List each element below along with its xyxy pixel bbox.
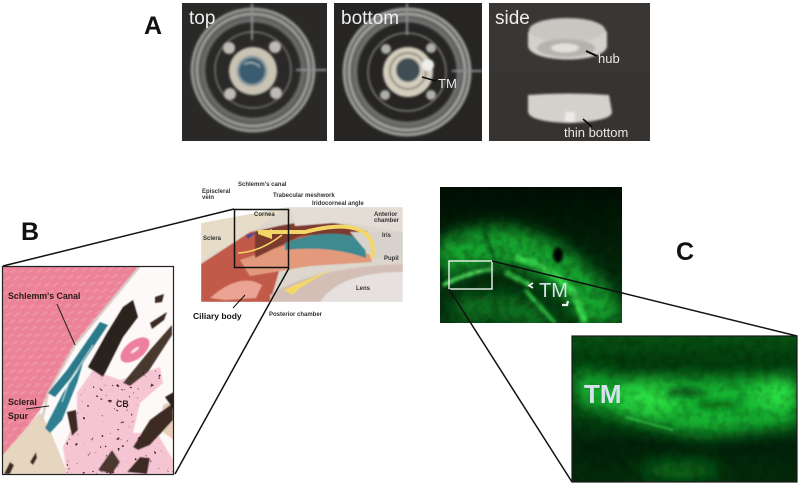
label: Iris: Iris bbox=[382, 233, 392, 239]
photo: histology section: Spur bbox=[8, 411, 29, 421]
label: TM on dish: TM bbox=[438, 76, 457, 91]
photo: bottom view of culture dish bbox=[334, 3, 482, 141]
label: Episcleral vein: Episcleral bbox=[202, 189, 231, 195]
photo: side view of culture dish bbox=[489, 3, 650, 141]
label: Posterior chamber: Posterior chamber bbox=[269, 312, 323, 318]
photo: green fluorescence zoom bbox=[570, 336, 800, 482]
label: hub: hub bbox=[598, 51, 620, 66]
label: side: side bbox=[495, 8, 530, 29]
pointer line: upper zoom B bbox=[3, 209, 234, 266]
callout box on diagram bbox=[234, 210, 288, 268]
label: top: top bbox=[189, 8, 215, 29]
pointer line: lower zoom C bbox=[449, 289, 572, 482]
panel label C: C bbox=[676, 238, 694, 266]
photo: histology section bbox=[2, 266, 174, 474]
diagram: eye anatomy: chamber bbox=[374, 218, 400, 224]
pointer: Scleral Spur bbox=[26, 406, 49, 409]
arrow: TM left bbox=[529, 283, 533, 288]
arrow: TM right bbox=[562, 301, 568, 305]
label: CB: CB bbox=[116, 399, 129, 409]
label: Schlemm's canal: Schlemm's canal bbox=[238, 182, 287, 188]
label: Trabecular meshwork: Trabecular meshwork bbox=[273, 193, 335, 199]
pigment speckle bbox=[60, 367, 174, 474]
label: TM overview: TM bbox=[539, 280, 568, 302]
arrow: thin bottom pointer bbox=[583, 119, 592, 127]
pointer line: lower zoom B bbox=[175, 268, 289, 474]
label: Sclera: Sclera bbox=[203, 236, 222, 242]
label: Anterior chamber: Anterior bbox=[374, 212, 398, 218]
label: thin bottom: thin bottom bbox=[564, 125, 628, 140]
photo: top view of culture dish bbox=[182, 3, 327, 141]
arrow: TM pointer bbox=[422, 77, 436, 81]
label: bottom: bottom bbox=[341, 8, 399, 29]
panel label B: B bbox=[21, 218, 39, 246]
label: Lens: Lens bbox=[356, 286, 371, 292]
diagram: eye anatomy bbox=[193, 182, 403, 321]
sclera tissue bbox=[2, 266, 140, 456]
pigment bbox=[88, 300, 138, 377]
label: Pupil: Pupil bbox=[384, 256, 399, 262]
diagram: eye anatomy: vein bbox=[202, 195, 214, 201]
Schlemm's canal stain bbox=[48, 322, 108, 397]
panel label A: A bbox=[144, 12, 162, 40]
label: Scleral Spur: Scleral bbox=[8, 397, 37, 407]
highlight box bbox=[449, 261, 492, 289]
pointer: Schlemm's Canal bbox=[57, 304, 75, 345]
pointer line: upper zoom C bbox=[492, 261, 797, 336]
label: TM zoom: TM bbox=[584, 379, 622, 409]
spur region bbox=[2, 412, 68, 474]
ciliary body bbox=[63, 367, 173, 474]
arrow: hub pointer bbox=[586, 51, 597, 56]
label: Cornea: Cornea bbox=[254, 212, 275, 218]
label: Schlemm's Canal: Schlemm's Canal bbox=[8, 291, 80, 301]
photo: green fluorescence overview bbox=[440, 187, 622, 323]
label: Iridocorneal angle: Iridocorneal angle bbox=[312, 201, 364, 207]
label: Ciliary body: Ciliary body bbox=[193, 311, 242, 321]
pointer: Ciliary body bbox=[233, 295, 245, 308]
